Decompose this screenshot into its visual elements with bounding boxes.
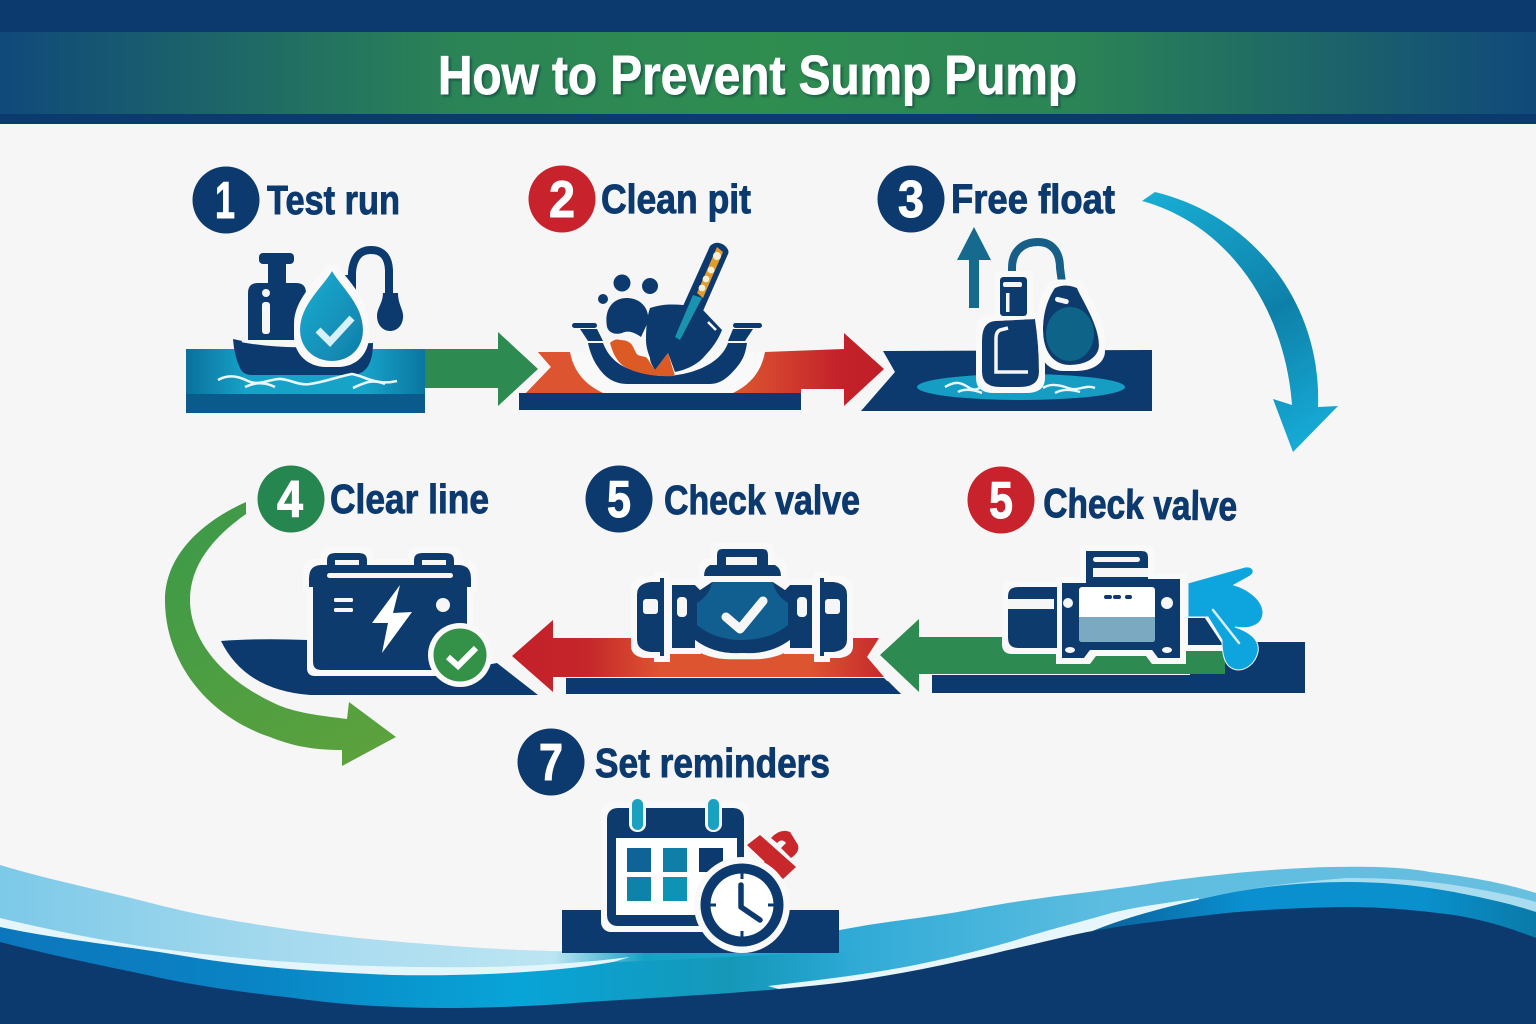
icon: calendar <box>607 808 744 926</box>
icon: pump housing with pipe <box>1008 551 1223 658</box>
step 1: test run <box>186 166 538 413</box>
curved blue arrow <box>1142 192 1338 452</box>
icon: pump and float <box>982 277 1099 387</box>
splash droplets <box>598 274 658 337</box>
step 3 number badge <box>878 166 944 232</box>
battery details <box>327 560 453 653</box>
step 5 (middle): check valve <box>512 466 901 694</box>
step 2 number badge <box>528 166 596 232</box>
step 4 base <box>221 639 538 695</box>
title: How to Prevent Sump Pump <box>438 44 1077 106</box>
float hose <box>1012 242 1063 290</box>
icon: green check badge <box>428 623 492 687</box>
step 4 number badge <box>258 466 324 532</box>
step 2 base <box>519 393 801 410</box>
icon: valve <box>637 549 847 656</box>
step 4 label: Clear line <box>330 476 489 522</box>
right badge: 5 <box>989 472 1013 530</box>
green arrow to step 2 <box>425 332 538 406</box>
step 3: free float <box>861 166 1152 411</box>
red arrow to step 3 <box>526 333 884 406</box>
icon: clock <box>694 857 790 953</box>
step 7 base <box>562 910 839 953</box>
step 1 number badge <box>192 166 260 234</box>
orange debris <box>610 339 675 376</box>
icon: pit with shovel <box>572 243 762 384</box>
icon: water drop check <box>300 271 363 361</box>
step 1 label: Test run <box>267 177 400 223</box>
housing details <box>1008 557 1173 653</box>
icon: battery <box>309 553 471 670</box>
header band <box>0 0 1536 124</box>
middle badge: 5 <box>607 471 631 529</box>
red arrow left <box>512 620 884 692</box>
pit bowl <box>572 323 762 384</box>
middle base <box>566 677 901 694</box>
middle label: Check valve <box>664 477 860 523</box>
step 2: clean pit <box>519 166 884 410</box>
icon: red alarm pin <box>747 831 798 879</box>
step 7 number badge <box>518 728 584 796</box>
ripples <box>945 383 1095 393</box>
valve details <box>643 557 840 640</box>
base redraw <box>566 678 901 694</box>
right base <box>932 642 1305 693</box>
pit halo <box>570 352 765 393</box>
step 3 number badge: 3 <box>898 171 924 229</box>
water ripples <box>218 374 397 388</box>
step 1 number badge: 1 <box>215 172 235 230</box>
water pool <box>917 374 1125 400</box>
step 3 label: Free float <box>951 176 1115 222</box>
shovel <box>646 243 728 372</box>
step 1 water base <box>186 349 425 413</box>
step 3 base <box>861 350 1152 411</box>
icon: water splash <box>1188 567 1263 670</box>
step 7 number badge: 7 <box>539 734 563 792</box>
middle badge <box>586 466 652 532</box>
pump details <box>996 282 1094 372</box>
step 5 (right): check valve <box>880 466 1305 693</box>
curved green arrow <box>165 502 396 766</box>
green arrow left <box>880 619 1225 692</box>
orange left band <box>526 352 615 393</box>
up arrow <box>957 227 991 308</box>
step 7 label: Set reminders <box>595 740 830 786</box>
right badge <box>968 466 1034 534</box>
step 2 label: Clean pit <box>601 176 751 222</box>
step 7: set reminders <box>518 728 839 953</box>
step 4 number badge: 4 <box>277 471 303 529</box>
footer wave <box>0 865 1536 1024</box>
calendar details <box>616 797 737 915</box>
step 4: clear line <box>221 466 538 695</box>
icon: sump pump <box>233 250 403 375</box>
right label: Check valve <box>1043 480 1238 529</box>
step 2 number badge: 2 <box>549 171 575 229</box>
